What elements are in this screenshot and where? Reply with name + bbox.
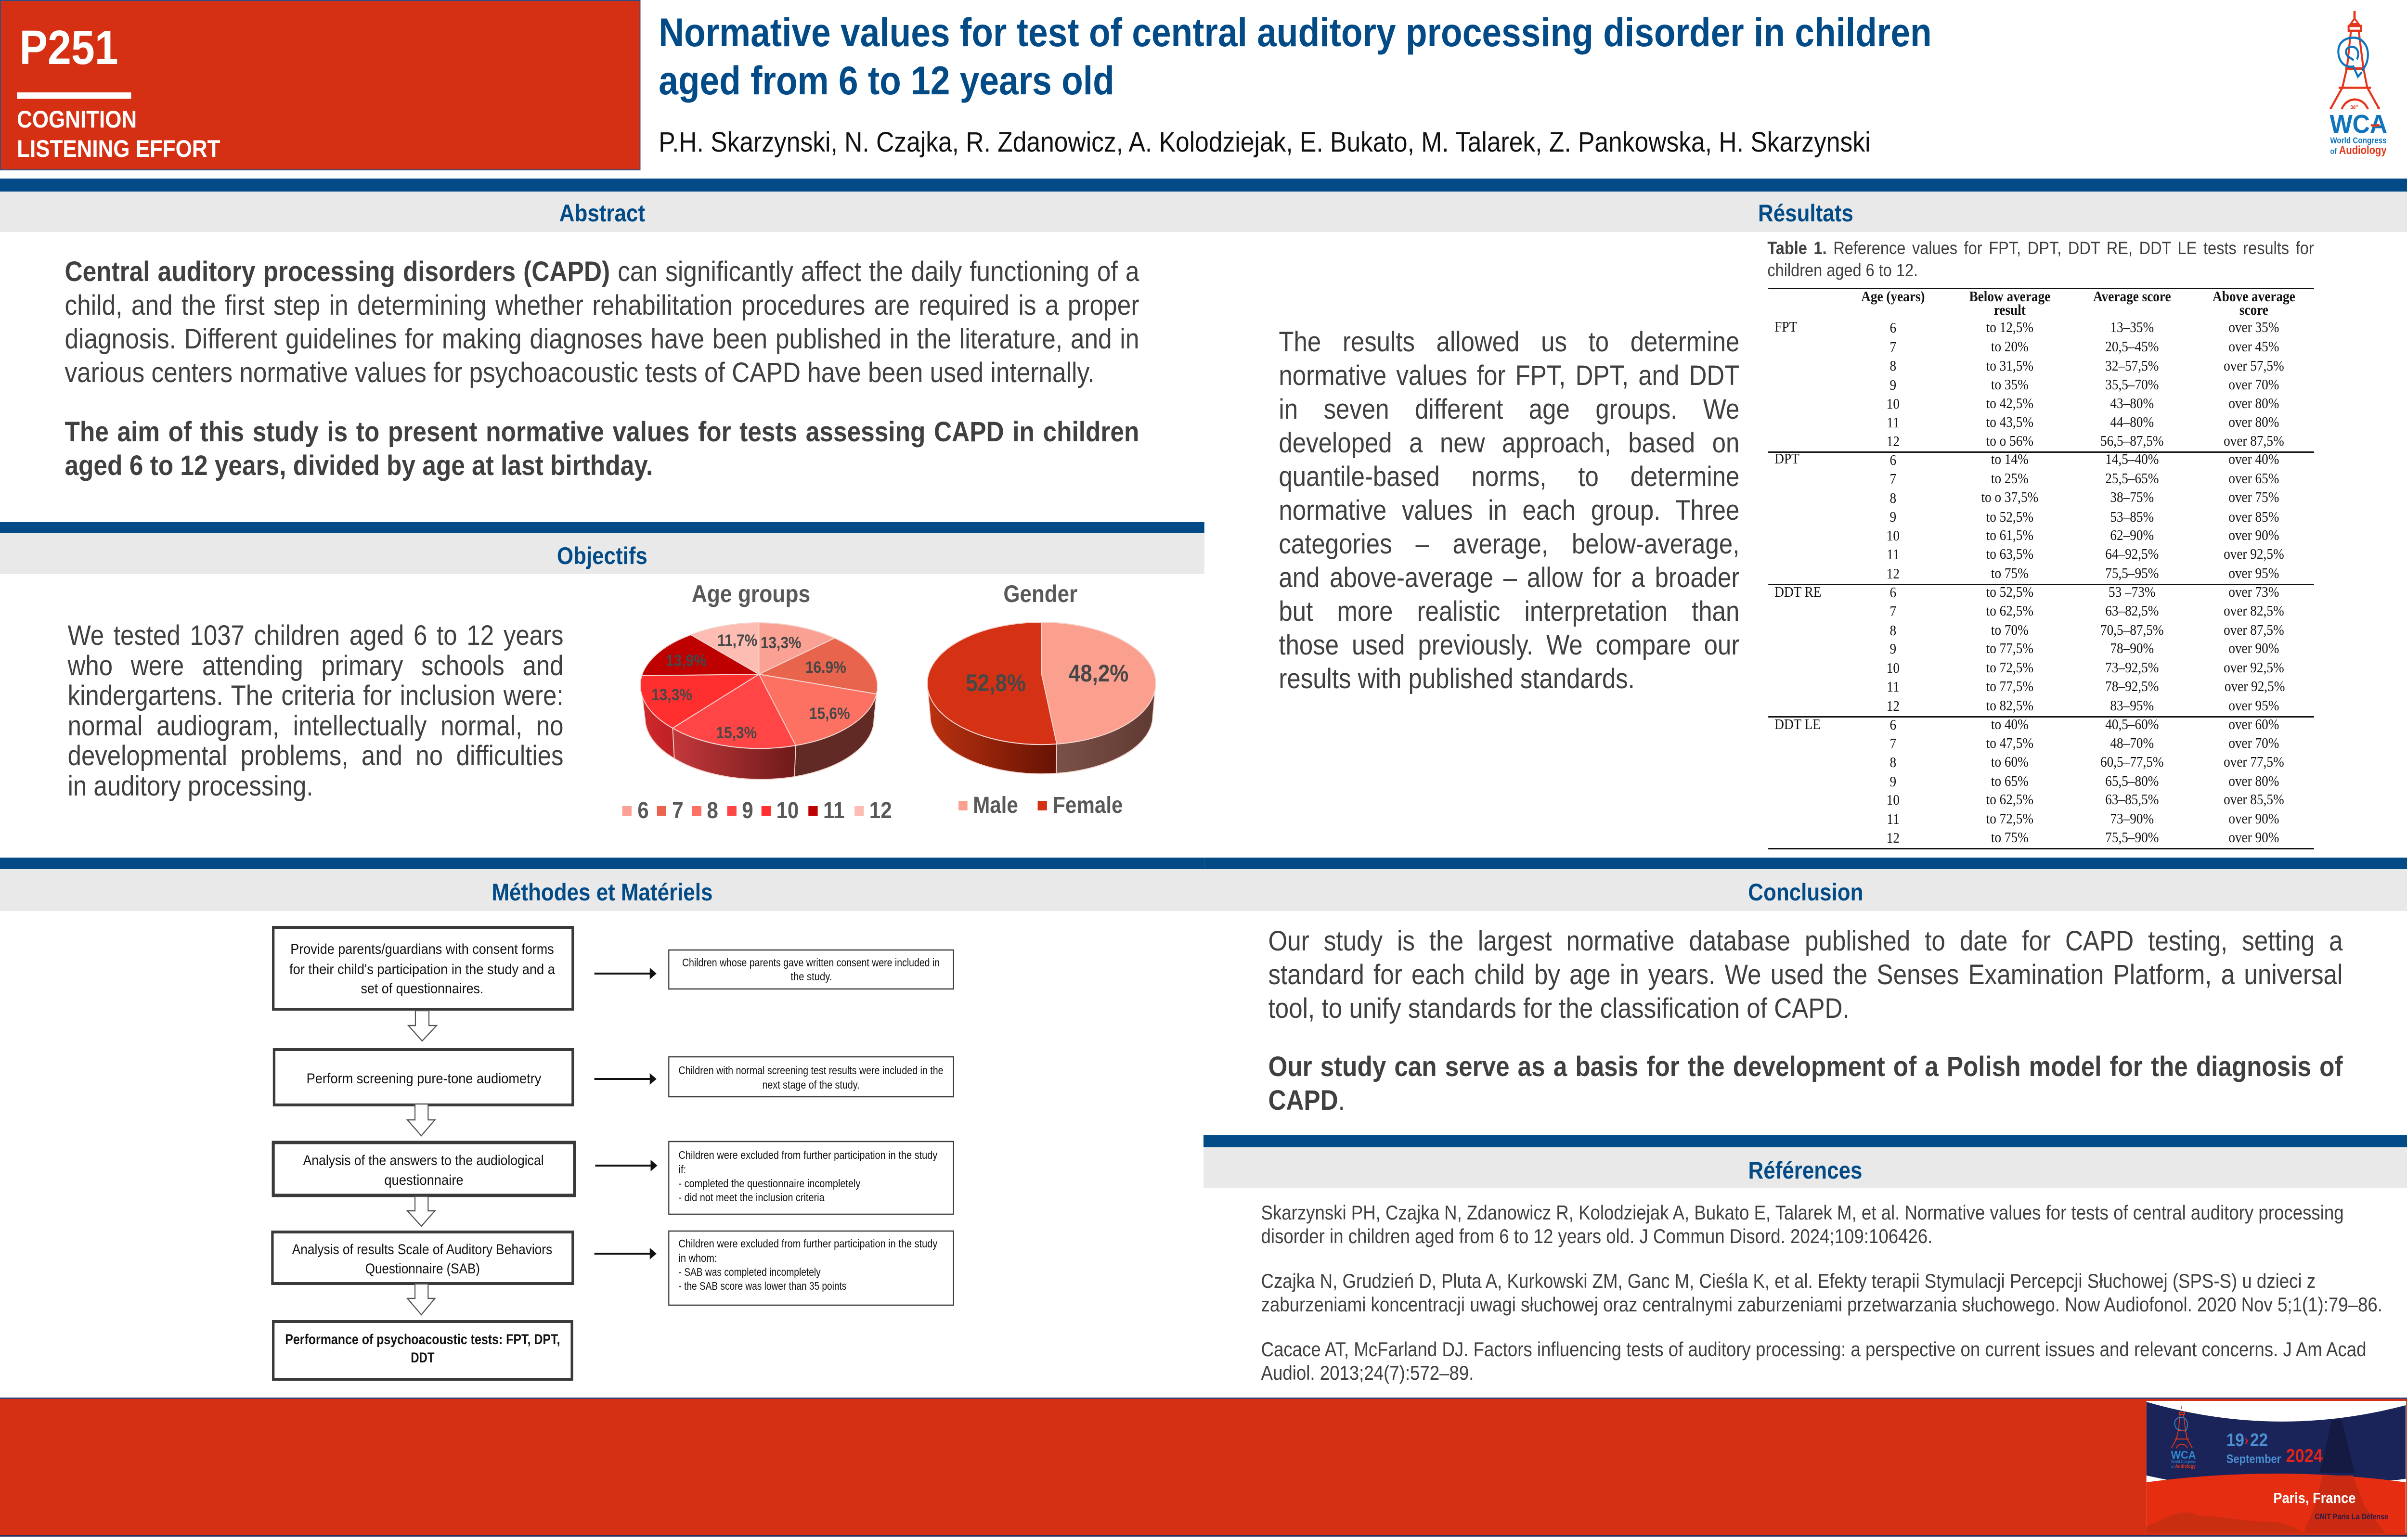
reference list: Skarzynski PH, Czajka N, Zdanowicz R, Kolodziejak A, Bukato E, Talarek M, et al. Normative values for tests of central auditory processing (1261, 1201, 2344, 1224)
conclusion text (1268, 925, 2343, 1116)
table rows: DDT LE: to 72,5% (1986, 810, 2033, 827)
heading: Méthodes et Matériels (0, 869, 1204, 911)
step 2: Perform screening pure-tone audiometry (307, 1070, 542, 1086)
congress banner: CNIT Paris La Défense (2315, 1513, 2388, 1521)
pie chart: age groups (622, 580, 892, 823)
table rows: FPT: 12 (1887, 433, 1900, 449)
table rows: DDT RE: DDT RE (1774, 584, 1821, 600)
step 3: Analysis of the answers to the audiological (303, 1152, 544, 1168)
icon: WCA congress logo: 36 (2350, 104, 2355, 111)
outcome box 4: - SAB was completed incompletely (678, 1266, 821, 1278)
icon: WCA congress logo: Audiology (2339, 144, 2387, 156)
table rows: DPT: over 65% (2228, 470, 2279, 487)
abstract text (65, 256, 1139, 481)
topic labels: COGNITION (17, 106, 137, 133)
down arrows (407, 1011, 437, 1315)
table rows: DDT LE: to 40% (1991, 716, 2029, 732)
table rows: DPT: 64–92,5% (2105, 546, 2159, 562)
results text: results with published standards. (1279, 663, 1635, 694)
outcome box 3: Children were excluded from further participation in the study (678, 1149, 937, 1161)
header panel: poster number and topics (0, 0, 640, 170)
section bar (1204, 1135, 2407, 1147)
heading: Conclusion (1204, 869, 2407, 911)
small logo: WCA (2171, 1449, 2196, 1461)
table rows: FPT: to 12,5% (1986, 319, 2033, 335)
table rows: DDT LE: DDT LE (1774, 716, 1821, 732)
table rows: DPT: to 25% (1991, 470, 2029, 487)
table rows: DDT RE: to 62,5% (1986, 603, 2033, 619)
legend: age groups: 6 (637, 797, 649, 823)
table rows: DDT LE: 40,5–60% (2105, 716, 2159, 732)
table rows: FPT: to 35% (1991, 376, 2029, 393)
step 4: Questionnaire (SAB) (365, 1260, 480, 1276)
table rows: DDT RE: 83–95% (2110, 697, 2154, 714)
results text: in seven different age groups. We (1279, 394, 1739, 425)
legend: gender: Female (1053, 792, 1123, 818)
charts: age groups and gender (622, 580, 1156, 823)
abstract text: The aim of this study is to present normative values for tests assessing CAPD in children (65, 416, 1139, 448)
table rows: DDT RE: 6 (1890, 584, 1896, 601)
table rows: DDT RE: 73–92,5% (2105, 659, 2159, 676)
table header (1861, 288, 2295, 318)
table rows: DPT: over 92,5% (2224, 546, 2284, 562)
outcome box 4: - the SAB score was lower than 35 points (678, 1280, 847, 1292)
conclusion text: tool, to unify standards for the classification of CAPD. (1268, 993, 1850, 1024)
table header: Above average (2213, 288, 2295, 305)
table rows: FPT: 10 (1887, 396, 1900, 412)
panel: abstract (0, 192, 1204, 481)
table rows: DDT LE: 6 (1890, 717, 1896, 733)
table rows: FPT: to o 56% (1986, 433, 2033, 449)
table rows: DDT RE: over 92,5% (2224, 659, 2284, 676)
step 2 (274, 1050, 573, 1105)
table rows: DDT RE: over 73% (2228, 584, 2279, 600)
table rows: DPT: over 75% (2228, 489, 2279, 505)
table rows: DPT: to 63,5% (1986, 546, 2033, 562)
table rows: DPT: to 75% (1991, 565, 2029, 581)
results text: but more realistic interpretation than (1279, 596, 1739, 627)
outcome box 2 (669, 1057, 954, 1097)
white divider bar (17, 92, 131, 99)
reference list: disorder in children aged from 6 to 12 years old. J Commun Disord. 2024;109:106426. (1261, 1225, 1932, 1247)
heading: Résultats (1204, 192, 2407, 232)
table rows: FPT: 32–57,5% (2105, 358, 2159, 374)
table rows: DDT LE: 8 (1890, 754, 1896, 770)
table rows: DPT: 12 (1887, 565, 1900, 582)
table rows: FPT: over 57,5% (2224, 358, 2284, 374)
step 5: DDT (411, 1349, 434, 1365)
table rows: DDT LE: 11 (1887, 811, 1899, 827)
table rows: DDT LE: 63–85,5% (2105, 791, 2159, 808)
topic labels (17, 106, 220, 162)
results text: normative values in each group. Three (1279, 495, 1739, 526)
abstract text: aged 6 to 12 years, divided by age at last birthday. (65, 450, 653, 481)
table rows: DPT: 25,5–65% (2105, 470, 2159, 487)
icon: WCA congress logo: World Congress (2330, 136, 2386, 145)
pie chart: age groups: 11,7% (717, 631, 757, 649)
table rows: FPT: 43–80% (2110, 395, 2154, 411)
reference list: Cacace AT, McFarland DJ. Factors influencing tests of auditory processing: a perspective on current issues and relevant concerns. J Am Acad (1261, 1338, 2367, 1360)
reference list: zaburzeniami koncentracji uwagi słuchowej oraz centralnymi zaburzeniami przetwarzania słuchowego. Now Audiofonol. 2020 Nov 5;1(1):79–86. (1261, 1293, 2382, 1316)
legend: age groups (622, 797, 892, 823)
table rows: FPT: over 80% (2228, 395, 2279, 411)
pie chart: gender (927, 580, 1156, 818)
objectives text (67, 620, 563, 802)
objectives text: We tested 1037 children aged 6 to 12 years (68, 620, 563, 651)
table rows: FPT: to 42,5% (1986, 395, 2033, 411)
Eiffel silhouette (2319, 1420, 2355, 1473)
table rows: DDT LE (1774, 716, 2284, 846)
objectives text: in auditory processing. (68, 770, 313, 802)
legend: gender (958, 792, 1123, 818)
topic labels: LISTENING EFFORT (17, 135, 220, 162)
footer band (0, 1398, 2407, 1537)
flowchart (271, 926, 954, 1381)
table rows: DDT RE: 78–92,5% (2105, 678, 2159, 694)
table header: Below average (1969, 288, 2050, 305)
pie chart: gender: 52,8% (966, 669, 1026, 696)
table rows: DDT LE: 73–90% (2110, 810, 2154, 827)
section bar (0, 522, 1204, 533)
table rows: DDT LE: 48–70% (2110, 735, 2154, 751)
table rows: FPT: to 20% (1991, 338, 2029, 355)
table rows: FPT: over 35% (2228, 319, 2279, 335)
table rows: DDT LE: over 80% (2228, 773, 2279, 789)
section bar (1204, 858, 2407, 869)
legend: age groups: 7 (672, 797, 684, 823)
table rows: DPT: to 61,5% (1986, 527, 2033, 543)
table rows: DDT RE: 53 –73% (2109, 584, 2156, 600)
table rows: DDT LE: 9 (1890, 773, 1896, 790)
outcome box 1 (669, 950, 954, 989)
table rows: DDT RE: 9 (1890, 641, 1896, 657)
outcome box 4: Children were excluded from further participation in the study (678, 1237, 937, 1250)
abstract text: various centers normative values for psychoacoustic tests of CAPD have been used internally. (65, 357, 1095, 388)
icon: WCA congress logo: th (2355, 104, 2358, 108)
results text: those used previously. We compare our (1279, 629, 1739, 661)
outcome box 3 (669, 1142, 954, 1214)
table rows: FPT: 11 (1887, 414, 1899, 431)
heading: Méthodes et Matériels: Méthodes et Matériels (492, 879, 712, 906)
pie chart: age groups: 13,3% (761, 633, 801, 652)
outcome box 4: in whom: (678, 1252, 717, 1264)
title (659, 10, 1932, 103)
table rows: DPT (1774, 450, 2284, 582)
table rows: DPT: 6 (1890, 452, 1896, 468)
table caption: Table 1. Reference values for FPT, DPT, DDT RE, DDT LE tests results for (1767, 238, 2314, 258)
table rows: DPT: over 40% (2228, 451, 2279, 467)
table rows: DDT LE: to 75% (1991, 829, 2029, 846)
table rows: DDT LE: over 90% (2228, 829, 2279, 846)
table rows: FPT: 56,5–87,5% (2100, 433, 2164, 449)
table rows: DDT LE: over 60% (2228, 716, 2279, 732)
congress banner (2146, 1401, 2406, 1533)
table rows: DDT LE: over 85,5% (2224, 791, 2284, 808)
table rows: DDT LE: to 47,5% (1986, 735, 2033, 751)
reference list (1261, 1201, 2382, 1384)
outcome box 3: - did not meet the inclusion criteria (678, 1191, 825, 1204)
results text (1279, 326, 1739, 694)
heading: Références (1204, 1147, 2407, 1188)
conclusion text: Our study is the largest normative database published to date for CAPD testing, setting a (1268, 925, 2342, 957)
table rows: DPT: over 95% (2228, 565, 2279, 581)
table rows: DDT LE: over 77,5% (2224, 754, 2284, 770)
table rows: DDT RE: to 52,5% (1986, 584, 2033, 600)
outcome box 4 (669, 1231, 954, 1305)
table rows: DPT: DPT (1774, 450, 1799, 467)
table rows: DDT LE: 12 (1887, 830, 1900, 846)
results text: developed a new approach, based on (1279, 427, 1739, 459)
objectives text: developmental problems, and no difficulties (68, 740, 563, 771)
table rows: DPT: 9 (1890, 509, 1896, 525)
step 3: questionnaire (384, 1171, 464, 1188)
step 1 (273, 927, 573, 1009)
banner dates: 19 (2226, 1430, 2244, 1450)
icon: WCA congress logo: WCA (2329, 110, 2387, 139)
heading: Abstract (0, 192, 1204, 232)
table rows: FPT: 13–35% (2110, 319, 2154, 335)
top divider bar (0, 179, 2407, 192)
table rows: DDT RE: 12 (1887, 698, 1900, 714)
pie chart: gender: 48,2% (1069, 659, 1128, 687)
table header: result (1994, 302, 2026, 318)
table rows: DDT RE: to 82,5% (1986, 697, 2033, 714)
table rows: DPT: 53–85% (2110, 509, 2154, 525)
outcome box 3: if: (678, 1163, 686, 1176)
table caption (1767, 238, 2314, 280)
outcome box 1: the study. (790, 970, 832, 983)
panel: conclusion (1204, 858, 2407, 1116)
table rows: DDT LE: 7 (1890, 735, 1896, 752)
table rows: FPT: over 45% (2228, 338, 2279, 355)
step 1: Provide parents/guardians with consent forms (290, 940, 554, 957)
table rows: FPT: 9 (1890, 377, 1896, 393)
table rows: DDT RE: over 90% (2228, 640, 2279, 656)
small logo: Audiology (2175, 1463, 2196, 1469)
table rows: DPT: over 90% (2228, 527, 2279, 543)
table rows: DDT RE: to 72,5% (1986, 659, 2033, 676)
table rows: DPT: 38–75% (2110, 489, 2154, 505)
step 4: Analysis of results Scale of Auditory Behaviors (292, 1241, 552, 1257)
small logo (2171, 1406, 2196, 1469)
small logo: of (2171, 1465, 2174, 1469)
table rows: FPT: over 70% (2228, 376, 2279, 393)
outcome box 2: next stage of the study. (762, 1078, 860, 1091)
table rows: DDT RE: over 95% (2228, 697, 2279, 714)
table rows: DPT: to 14% (1991, 451, 2029, 467)
outcome box 1: Children whose parents gave written consent were included in (682, 956, 940, 969)
legend: age groups: 8 (707, 797, 718, 823)
results text: quantile-based norms, to determine (1279, 461, 1739, 492)
step 5 (273, 1322, 572, 1379)
table rows: DPT: 11 (1887, 546, 1899, 563)
legend: gender: Male (973, 792, 1018, 818)
pie chart: age groups: 16.9% (805, 658, 846, 676)
icon: WCA congress logo (2329, 11, 2387, 156)
table header: score (2239, 302, 2268, 318)
results text: and above-average – allow for a broader (1279, 562, 1739, 593)
table rows: DPT: 14,5–40% (2105, 451, 2159, 467)
table rows: DDT LE: to 60% (1991, 754, 2029, 770)
table rows: DDT RE: over 92,5% (2225, 678, 2285, 694)
table rows: FPT: to 31,5% (1986, 358, 2033, 374)
table rows: FPT (1774, 319, 2284, 449)
pie chart: age groups: 13,3% (651, 685, 692, 704)
heading: Résultats: Résultats (1758, 200, 1853, 227)
objectives text: kindergartens. The criteria for inclusion were: (68, 680, 563, 711)
table rows: DDT LE: over 70% (2228, 735, 2279, 751)
outcome box 2: Children with normal screening test results were included in the (678, 1064, 944, 1077)
table rows: FPT: 8 (1890, 358, 1896, 374)
heading: Objectifs (0, 533, 1204, 574)
congress banner: September (2226, 1452, 2281, 1465)
panel: references (1204, 1135, 2407, 1384)
reference list: Audiol. 2013;24(7):572–89. (1261, 1361, 1474, 1384)
legend: age groups: 12 (869, 797, 892, 823)
table rows: DDT LE: 65,5–80% (2105, 773, 2159, 789)
abstract text: Central auditory processing disorders (CAPD) can significantly affect the daily functioning of a (65, 256, 1139, 287)
abstract text: diagnosis. Different guidelines for making diagnoses have been published in the literature, and in (65, 323, 1139, 355)
conclusion text: standard for each child by age in years. We used the Senses Examination Platform, a universal (1268, 959, 2342, 990)
heading: Abstract: Abstract (559, 200, 645, 227)
table rows: DPT: 75,5–95% (2105, 565, 2159, 581)
step 3 (273, 1142, 574, 1195)
reference list: Czajka N, Grudzień D, Pluta A, Kurkowski ZM, Ganc M, Cieśla K, et al. Efekty terapii Stymulacji Percepcji Słuchowej (SPS-S) u dzieci z (1261, 1270, 2316, 1292)
table rows: FPT: FPT (1774, 319, 1797, 335)
table rows: FPT: 20,5–45% (2105, 338, 2159, 355)
table rows: DPT: over 85% (2228, 509, 2279, 525)
pie chart: age groups: Age groups (692, 580, 810, 608)
table rows: DDT RE: 8 (1890, 622, 1896, 639)
heading: Conclusion: Conclusion (1748, 879, 1863, 906)
congress banner: › (2245, 1433, 2249, 1448)
panel: results (1204, 192, 2407, 849)
step 4 (272, 1232, 573, 1283)
table rows: DDT LE: 10 (1887, 792, 1900, 808)
table header: Average score (2093, 288, 2171, 305)
table rows: DDT RE: 70,5–87,5% (2100, 622, 2164, 638)
table rows: DDT LE: 60,5–77,5% (2100, 754, 2164, 770)
table rows: DDT RE: 78–90% (2110, 640, 2154, 656)
table rows: DDT RE: to 70% (1991, 622, 2029, 638)
table rows: DDT RE: 63–82,5% (2105, 603, 2159, 619)
table rows: FPT: 35,5–70% (2105, 376, 2159, 393)
table rows: FPT: to 43,5% (1986, 414, 2033, 430)
table rows: FPT: 7 (1890, 339, 1896, 355)
pie chart: age groups: 15,3% (716, 723, 757, 742)
table rows: DDT LE: to 62,5% (1986, 791, 2033, 808)
table rows: DDT RE: 10 (1887, 660, 1900, 676)
table rows: DDT RE: to 77,5% (1986, 640, 2033, 656)
table rows: DDT RE: 11 (1887, 679, 1899, 695)
icon: WCA congress logo: of (2330, 147, 2337, 156)
table rows: DPT: 7 (1890, 471, 1896, 487)
step 1: set of questionnaires. (361, 980, 483, 996)
table rows: DDT LE: to 65% (1991, 773, 2029, 789)
right arrows (595, 974, 652, 1254)
title: Normative values for test of central auditory processing disorder in children (659, 10, 1932, 55)
pie chart: age groups: 15,6% (809, 704, 850, 722)
table rows: FPT: 6 (1890, 320, 1896, 336)
table rows: FPT: over 80% (2228, 414, 2279, 430)
table rows: DDT RE: over 82,5% (2224, 603, 2284, 619)
authors: P.H. Skarzynski, N. Czajka, R. Zdanowicz, A. Kolodziejak, E. Bukato, M. Talarek, Z. Pankowska, H. Skarzynski (659, 127, 1871, 158)
congress banner: 2024 (2286, 1445, 2323, 1466)
pie chart: gender: Gender (1003, 580, 1077, 607)
table rows: DPT: 62–90% (2110, 527, 2154, 543)
abstract text: child, and the first step in determining whether rehabilitation procedures are required is a proper (65, 290, 1139, 321)
conclusion text: Our study can serve as a basis for the development of a Polish model for the diagnosis of (1268, 1051, 2342, 1082)
objectives text: who were attending primary schools and (68, 650, 563, 681)
table rows: FPT: over 87,5% (2224, 433, 2284, 449)
small logo: World Congress (2171, 1460, 2196, 1464)
table rows: DPT: 8 (1890, 490, 1896, 506)
table rows: DDT RE: to 77,5% (1986, 678, 2033, 694)
panel: objectives (0, 522, 1204, 823)
step 5: Performance of psychoacoustic tests: FPT, DPT, (285, 1331, 560, 1347)
pie chart: age groups: 13,9% (666, 651, 707, 669)
results text: categories – average, below-average, (1279, 528, 1739, 560)
table rows: FPT: 44–80% (2110, 414, 2154, 430)
table rows: DDT LE: over 90% (2228, 810, 2279, 827)
results text: normative values for FPT, DPT, and DDT (1279, 360, 1739, 391)
table rows: DDT RE: over 87,5% (2224, 622, 2284, 638)
table header: Age (years) (1861, 288, 1925, 305)
results text: The results allowed us to determine (1279, 326, 1739, 358)
table caption: children aged 6 to 12. (1767, 260, 1918, 280)
table rows: DPT: 10 (1887, 527, 1900, 544)
section bar (0, 858, 1204, 869)
table rows: DDT RE (1774, 584, 2285, 714)
legend: age groups: 9 (742, 797, 753, 823)
table rows: DDT LE: 75,5–90% (2105, 829, 2159, 846)
title: aged from 6 to 12 years old (659, 58, 1114, 103)
table rows: DPT: to 52,5% (1986, 509, 2033, 525)
table: reference values (1768, 288, 2314, 849)
congress banner: 22 (2250, 1430, 2268, 1450)
panel: methods (0, 858, 1204, 1381)
table rows: DDT RE: 7 (1890, 603, 1896, 619)
heading: Références: Références (1748, 1157, 1862, 1184)
congress banner: Paris, France (2273, 1490, 2355, 1506)
outcome box 3: - completed the questionnaire incompletely (678, 1177, 861, 1190)
legend: age groups: 10 (776, 797, 799, 823)
conclusion text: CAPD. (1268, 1085, 1345, 1116)
heading: Objectifs: Objectifs (557, 542, 647, 569)
poster number: P251 (19, 21, 118, 75)
table rows: DPT: to o 37,5% (1981, 489, 2038, 505)
step 1: for their child's participation in the study and a (289, 961, 555, 977)
legend: age groups: 11 (823, 797, 845, 823)
objectives text: normal audiogram, intellectually normal, no (68, 710, 563, 741)
